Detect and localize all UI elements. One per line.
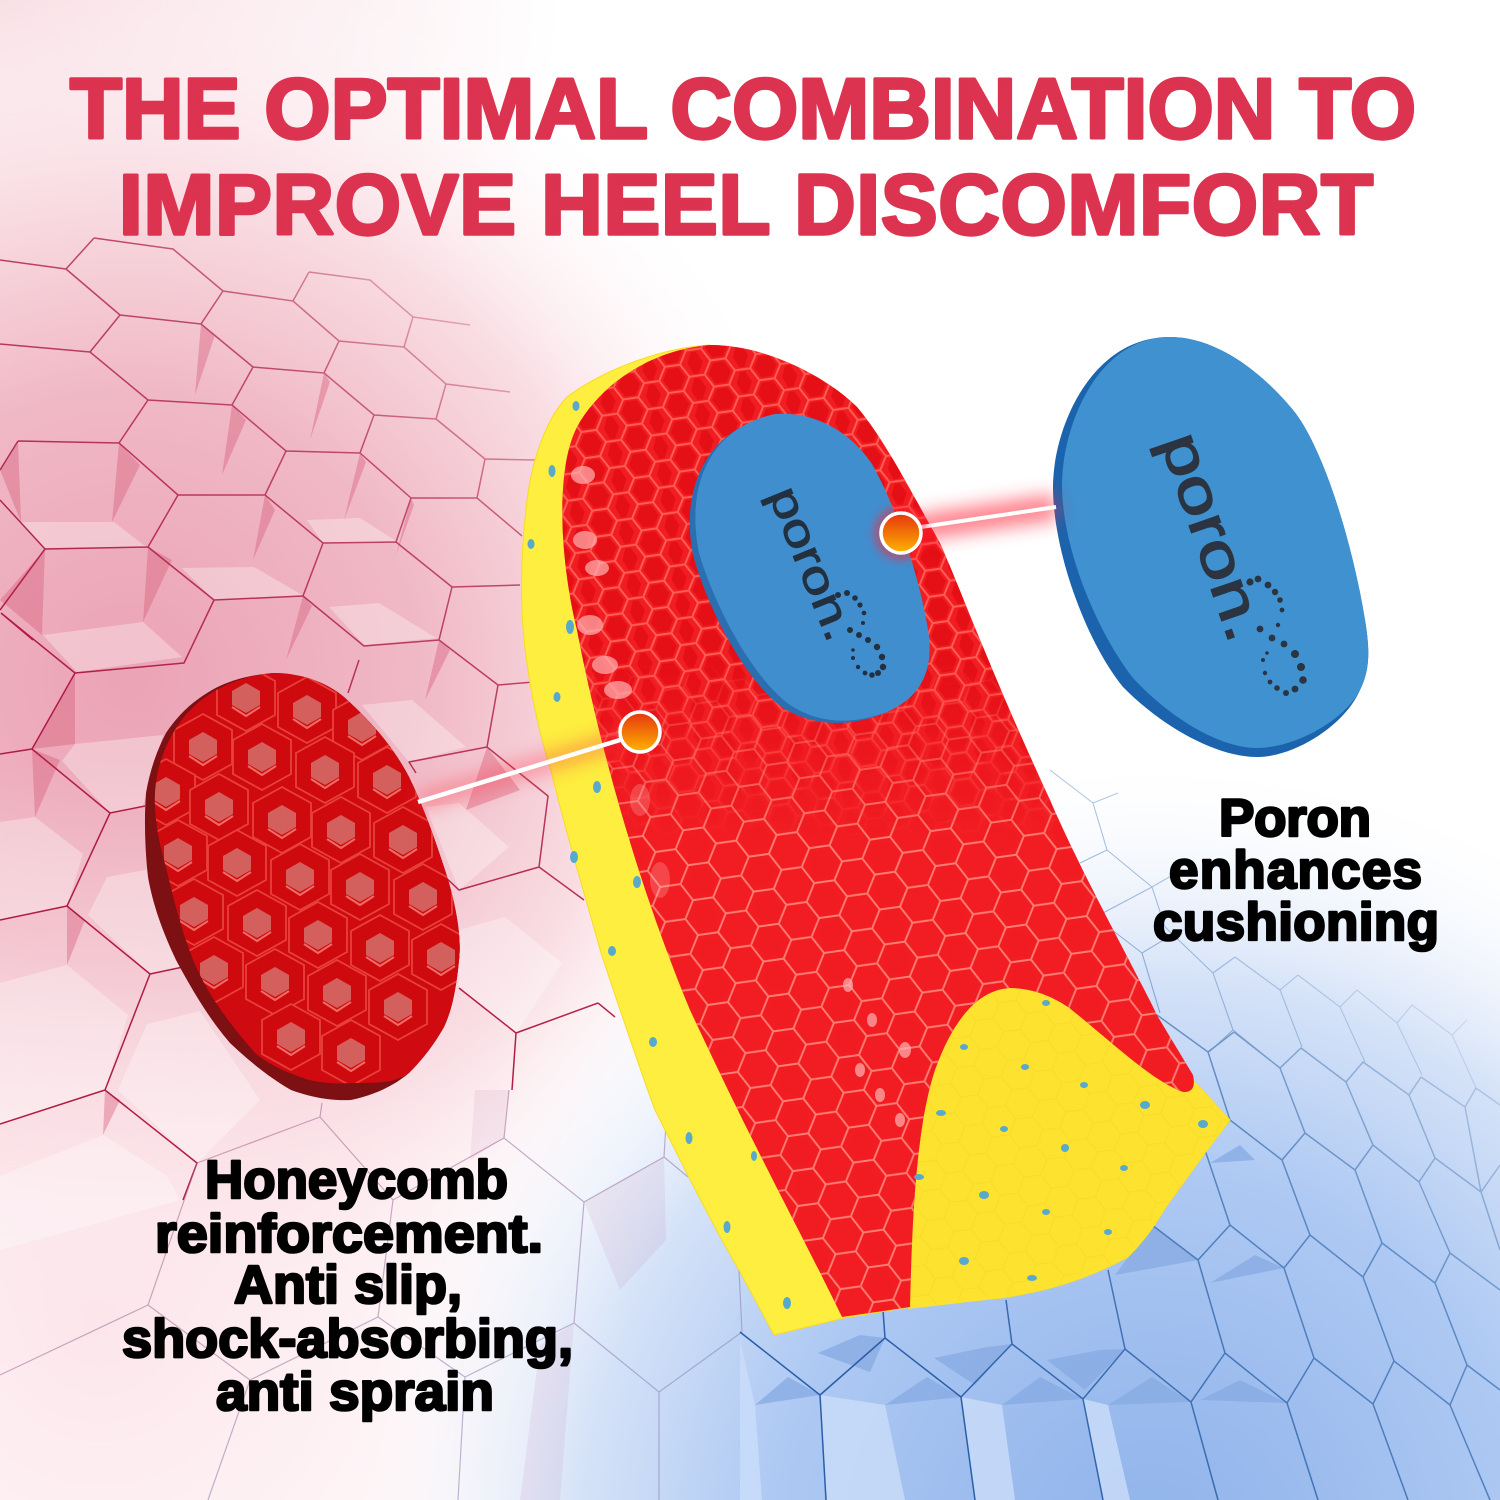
insole: patch honeycomb texture	[908, 988, 1230, 1309]
text: honeycomb benefit: shock-absorbing,	[122, 1309, 573, 1369]
background: honeycomb shading, blue side	[740, 1145, 1287, 1500]
text: poron benefit: Poron	[1219, 789, 1371, 848]
connector: left pad to insole	[418, 740, 620, 802]
label: poron logo on pad	[1148, 424, 1307, 696]
pad face	[155, 673, 460, 1083]
insole: perforation dots	[528, 401, 1208, 1309]
insole: yellow forefoot patch	[908, 988, 1230, 1309]
text: honeycomb benefit: Anti slip,	[234, 1255, 462, 1315]
text: poron benefit: enhances	[1169, 841, 1422, 900]
right poron pad	[1053, 337, 1368, 757]
insole: glossy highlights	[571, 466, 911, 1127]
background: honeycomb shading, red side	[0, 324, 666, 1500]
text: poron benefit: cushioning	[1153, 893, 1439, 952]
insole: yellow base layer	[522, 345, 1230, 1335]
text: honeycomb benefit: reinforcement.	[155, 1204, 543, 1264]
insole: red gel honeycomb layer	[562, 345, 1194, 1317]
title: IMPROVE HEEL DISCOMFORT	[119, 158, 1373, 253]
marker: gel layer	[620, 712, 660, 752]
pad edge	[145, 673, 460, 1100]
text: poron benefit	[1153, 789, 1439, 952]
left honeycomb gel pad	[137, 665, 470, 1100]
pad honeycomb cells	[154, 674, 460, 1084]
text: honeycomb benefit	[122, 1150, 573, 1422]
pad edge	[1053, 337, 1368, 757]
insole: honeycomb texture upper	[562, 345, 1054, 816]
connector: right pad to insole	[921, 507, 1056, 527]
text: honeycomb benefit: anti sprain	[216, 1362, 494, 1422]
pad face	[1062, 337, 1368, 748]
text: honeycomb benefit: Honeycomb	[205, 1150, 508, 1210]
insole	[500, 330, 1260, 1340]
poron pad on insole	[690, 414, 930, 723]
title	[70, 62, 1416, 253]
label: poron logo on pad: poron.	[1148, 424, 1279, 649]
label: poron logo on insole pad: poron.	[759, 479, 865, 648]
title: THE OPTIMAL COMBINATION TO	[70, 62, 1416, 157]
marker: poron layer	[873, 505, 929, 561]
label: poron logo on insole pad	[759, 479, 886, 678]
insole: honeycomb texture lower	[588, 675, 1186, 1314]
